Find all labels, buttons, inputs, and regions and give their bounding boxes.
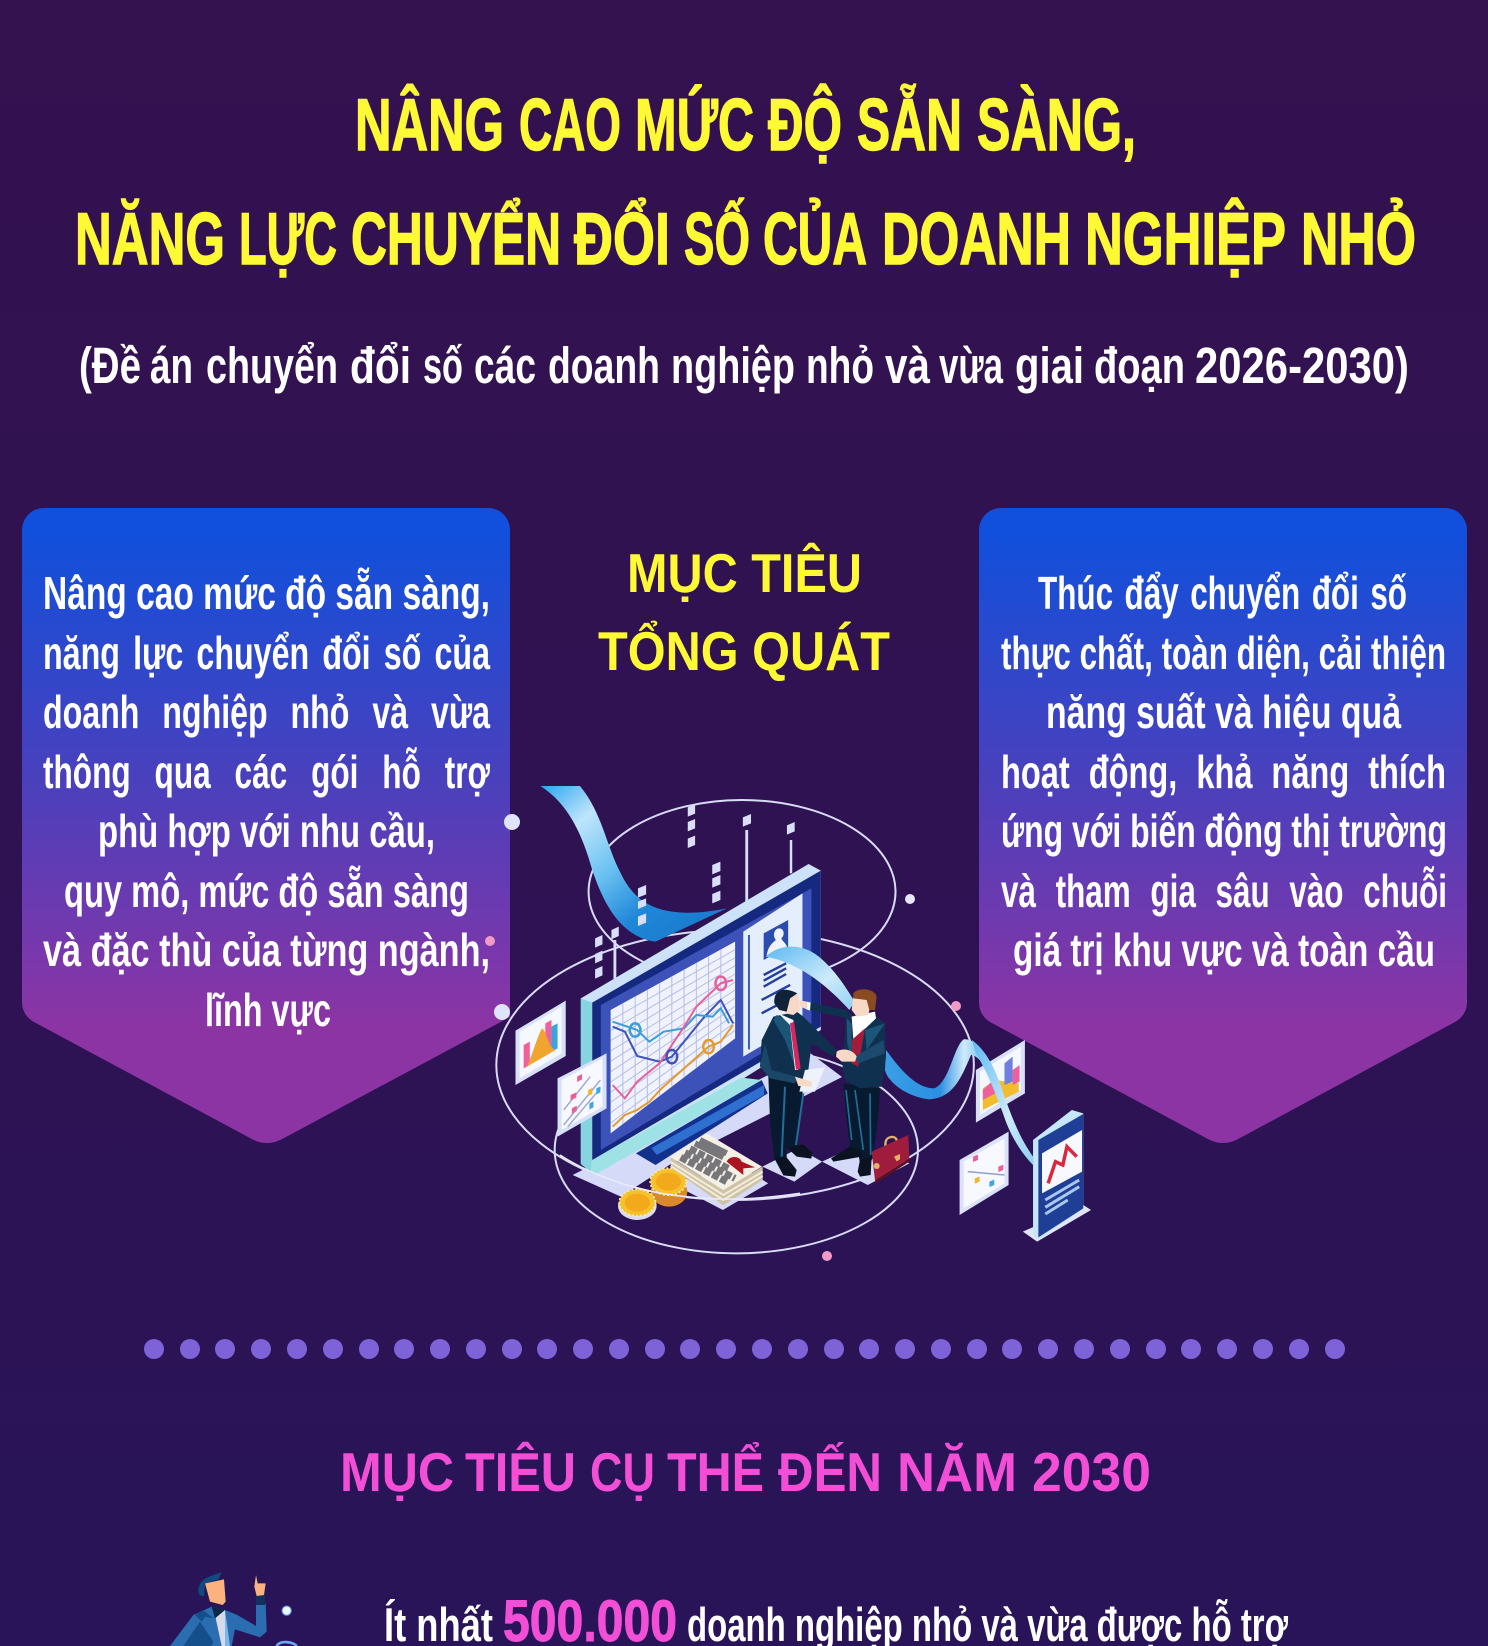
title: CAO: [519, 85, 621, 166]
subtitle: đổi: [350, 337, 411, 394]
title: SÀNG,: [977, 85, 1136, 166]
right man: [798, 989, 886, 1177]
title: CHUYỂN: [351, 199, 561, 280]
left goal text: năng lực chuyển đổi số của: [43, 627, 490, 679]
subtitle: nghiệp: [671, 337, 795, 394]
monitor: [581, 864, 821, 1173]
subtitle: và: [885, 337, 930, 394]
title: NÂNG: [355, 85, 504, 166]
heading: specific objectives: THỂ: [667, 1441, 764, 1503]
title: LỰC: [239, 199, 337, 280]
right goal text: [1001, 567, 1447, 976]
subtitle: 2026-2030): [1195, 337, 1409, 394]
subtitle: giai: [1015, 337, 1084, 394]
ribbon lower segments: [766, 947, 855, 1010]
document stack: [670, 1133, 763, 1205]
heading: specific objectives: 2030: [1032, 1441, 1151, 1503]
icon: man pointing up: [170, 1572, 297, 1646]
panel: right goal: [979, 508, 1467, 1143]
ribbon to phone: [972, 1040, 1033, 1165]
title: ĐỘ: [768, 85, 842, 166]
subtitle: vừa: [939, 337, 1003, 394]
chart lines: [613, 977, 733, 1127]
left goal text: lĩnh vực: [205, 984, 331, 1036]
floor platform: [573, 1053, 909, 1210]
heading: specific objectives: TIÊU: [465, 1441, 576, 1503]
subtitle: số: [423, 337, 463, 394]
left goal text: thông qua các gói hỗ trợ: [43, 746, 490, 798]
subtitle: án: [150, 337, 193, 394]
scatter card right: [960, 1132, 1009, 1215]
heading: specific objectives: [340, 1441, 1151, 1503]
decorative node dots: [485, 814, 961, 1261]
left man: [760, 990, 837, 1177]
heading: specific objectives: ĐẾN: [778, 1441, 882, 1503]
subtitle: [79, 337, 1409, 394]
panel: left goal: [22, 508, 510, 1143]
left goal text: Nâng cao mức độ sẵn sàng,: [43, 567, 490, 619]
title: NĂNG: [75, 199, 225, 280]
subtitle: (Đề: [79, 337, 141, 394]
heading: specific objectives: NĂM: [897, 1441, 1017, 1503]
subtitle: doanh: [548, 337, 660, 394]
title: ĐỔI: [574, 199, 670, 280]
phone: [1023, 1110, 1091, 1242]
floating data bars: [595, 804, 795, 1007]
title: SẴN: [857, 85, 962, 166]
heading: specific objectives: MỤC: [340, 1441, 454, 1503]
orbit ellipses: [496, 800, 974, 1253]
title: DOANH: [882, 199, 1071, 280]
title: SỐ: [684, 198, 750, 280]
heading: general objective: TỔNG QUÁT: [598, 620, 890, 682]
scatter card left: [558, 1053, 607, 1137]
left goal text: và đặc thù của từng ngành,: [43, 924, 490, 976]
subtitle: các: [474, 337, 536, 394]
chart card right: [976, 1040, 1025, 1123]
title: NGHIỆP: [1085, 199, 1286, 280]
monitor stand: [636, 1080, 768, 1165]
left goal text: phù hợp với nhu cầu,: [98, 805, 435, 857]
subtitle: nhỏ: [806, 337, 874, 394]
chart card top left: [516, 1001, 566, 1085]
title: MỨC: [635, 85, 754, 166]
dotted divider: [144, 1339, 1345, 1359]
title: CỦA: [763, 199, 867, 280]
title: [75, 85, 1416, 280]
briefcase: [872, 1135, 909, 1183]
ribbon upper: [540, 786, 727, 942]
left goal text: [43, 567, 490, 1036]
left goal text: doanh nghiệp nhỏ và vừa: [43, 686, 490, 738]
left goal text: quy mô, mức độ sẵn sàng: [64, 865, 469, 917]
subtitle: đoạn: [1094, 337, 1185, 394]
heading: specific objectives: CỤ: [590, 1441, 655, 1503]
specific objective text: [384, 1589, 1288, 1646]
subtitle: chuyển: [206, 337, 338, 394]
profile card: [764, 920, 788, 960]
documents and coins: [560, 1133, 800, 1220]
heading: general objective: MỤC TIÊU: [627, 542, 862, 604]
illustration: business handshake with dashboard: [496, 786, 1091, 1253]
businessmen shaking hands: [760, 989, 909, 1183]
title: NHỎ: [1301, 199, 1416, 280]
coins: [618, 1168, 687, 1220]
heading: general objective: [598, 542, 890, 682]
